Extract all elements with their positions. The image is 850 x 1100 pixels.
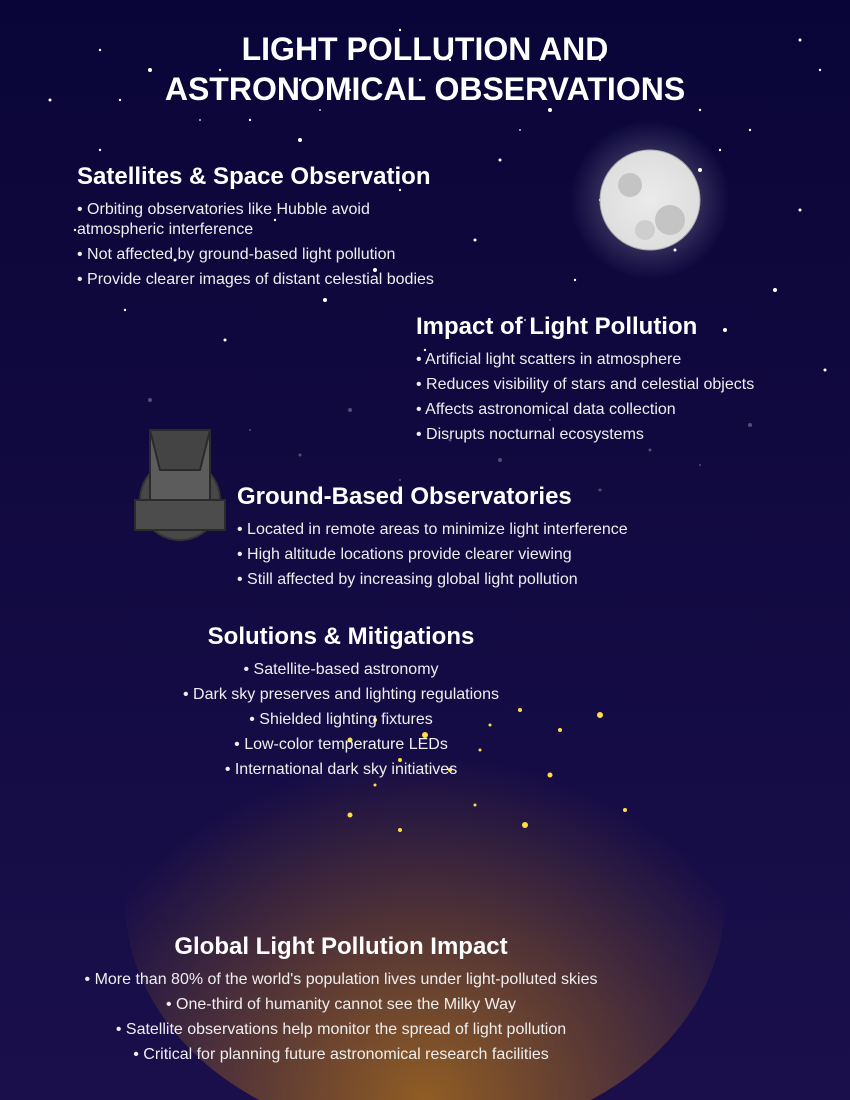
faint stars [148,398,752,492]
panel: ground-based observatories: Ground-Based Observatories [237,483,572,510]
panel: satellites and space observation: Satellites & Space Observation [77,163,430,190]
icon: telescope observatory [135,430,225,540]
panel: impact of light pollution [416,313,754,443]
panel: impact of light pollution: • Affects astronomical data collection [416,401,676,418]
panel: satellites and space observation: • Orbiting observatories like Hubble avoid [77,201,370,218]
title: LIGHT POLLUTION AND [242,31,608,67]
icon: moon [570,120,730,280]
panel: impact of light pollution: • Reduces visibility of stars and celestial objects [416,376,754,393]
panel: solutions and mitigations: • Shielded lighting fixtures [249,711,433,728]
panel: solutions and mitigations [183,623,499,778]
panel: solutions and mitigations: • Satellite-based astronomy [243,661,439,678]
panel: ground-based observatories: • Located in remote areas to minimize light interference [237,521,628,538]
panel: global light pollution impact: • Satellite observations help monitor the spread of light pollution [116,1021,566,1038]
panel: global light pollution impact: • One-third of humanity cannot see the Milky Way [166,996,516,1013]
panel: solutions and mitigations: Solutions & Mitigations [208,623,474,650]
city lights [348,708,627,832]
panel: impact of light pollution: Impact of Light Pollution [416,313,697,340]
panel: satellites and space observation [77,163,434,288]
panel: global light pollution impact [85,933,597,1063]
title: ASTRONOMICAL OBSERVATIONS [165,71,685,107]
panel: solutions and mitigations: • Dark sky preserves and lighting regulations [183,686,499,703]
panel: solutions and mitigations: • International dark sky initiatives [225,761,457,778]
panel: global light pollution impact: Global Light Pollution Impact [174,933,508,960]
panel: satellites and space observation: • Not affected by ground-based light pollution [77,246,395,263]
panel: solutions and mitigations: • Low-color temperature LEDs [234,736,448,753]
panel: ground-based observatories: • Still affected by increasing global light pollution [237,571,578,588]
panel: global light pollution impact: • Critical for planning future astronomical research facilities [133,1046,549,1063]
bright stars [48,29,826,372]
title [165,31,685,107]
city light glow [125,660,725,1100]
panel: satellites and space observation: • Provide clearer images of distant celestial bodies [77,271,434,288]
panel: global light pollution impact: • More than 80% of the world's population lives under light-polluted skies [85,971,597,988]
panel: satellites and space observation: atmospheric interference [77,221,253,238]
panel: ground-based observatories: • High altitude locations provide clearer viewing [237,546,572,563]
panel: ground-based observatories [237,483,628,588]
panel: impact of light pollution: • Artificial light scatters in atmosphere [416,351,681,368]
panel: impact of light pollution: • Disrupts nocturnal ecosystems [416,426,644,443]
